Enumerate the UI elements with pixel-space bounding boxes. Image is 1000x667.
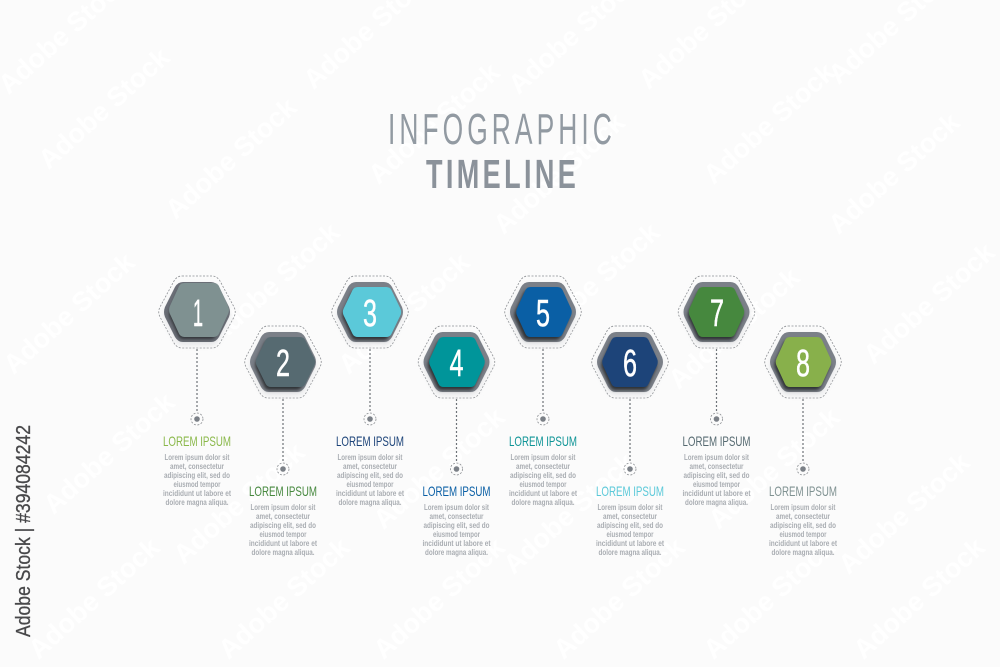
node dot [710,413,722,425]
watermark pattern: Adobe Stock [488,106,631,240]
watermark pattern: Adobe Stock [698,56,841,190]
heading: LOREM IPSUM [336,433,404,449]
body text: adipiscing elit, sed do [510,471,576,480]
watermark pattern: Adobe Stock [548,531,691,665]
body text: dolore magna aliqua. [598,548,662,557]
body text: dolore magna aliqua. [252,548,314,557]
body text: incididunt ut labore et [249,539,317,548]
body text [596,503,664,557]
watermark pattern: Adobe Stock [823,106,966,240]
body text: Lorem ipsum dolor sit [424,503,489,512]
heading: LOREM IPSUM [422,483,490,499]
body text: incididunt ut labore et [682,489,751,498]
title line 1: INFOGRAPHIC [388,104,612,154]
body text: eiusmod tempor [606,530,654,539]
body text: Lorem ipsum dolor sit [770,503,836,512]
icon: hexagon 4: 4 [449,343,464,385]
icon: hexagon 7 [678,276,755,348]
icon: hexagon 5: 5 [536,293,550,335]
node dot [191,413,203,425]
watermark pattern: Adobe Stock [698,531,841,665]
body text: amet, consectetur [516,462,570,471]
body text: dolore magna aliqua. [338,498,402,507]
watermark pattern: Adobe Stock [33,41,176,175]
connector line [282,399,284,462]
connector line [542,349,544,412]
icon: hexagon 3: 3 [363,293,377,335]
body text: dolore magna aliqua. [512,498,574,507]
body text: adipiscing elit, sed do [597,521,663,530]
body text: incididunt ut labore et [336,489,404,498]
icon: hexagon 1: 1 [193,293,203,335]
body text: adipiscing elit, sed do [424,521,490,530]
watermark pattern: Adobe Stock [833,446,976,580]
watermark pattern: Adobe Stock [203,216,346,350]
body text: amet, consectetur [170,462,224,471]
step 5 [505,276,581,507]
watermark pattern: Adobe Stock [368,531,511,665]
node dot [797,463,809,475]
watermark pattern: Adobe Stock [0,246,141,380]
body text: amet, consectetur [776,512,830,521]
body text: Lorem ipsum dolor sit [684,453,749,462]
body text: dolore magna aliqua. [685,498,748,507]
body text: eiusmod tempor [174,480,220,489]
title [388,104,612,197]
icon: hexagon 2 [245,326,321,398]
body text: incididunt ut labore et [509,489,577,498]
body text: adipiscing elit, sed do [684,471,750,480]
body text [769,503,837,557]
watermark pattern: Adobe Stock [160,91,303,225]
icon: hexagon 3 [332,276,408,348]
connector line [802,399,804,462]
node dot [537,413,549,425]
watermark pattern: Adobe Stock [333,246,476,380]
watermark pattern: Adobe Stock [168,436,311,570]
icon: hexagon 8: 8 [796,343,810,385]
heading: LOREM IPSUM [682,433,750,449]
icon: hexagon 5 [505,276,581,348]
body text: incididunt ut labore et [163,489,231,498]
body text [422,503,491,557]
body text: Lorem ipsum dolor sit [598,503,663,512]
body text: eiusmod tempor [520,480,566,489]
body text: incididunt ut labore et [422,539,491,548]
icon: hexagon 4 [418,326,495,398]
watermark pattern: Adobe Stock [498,446,641,580]
body text: incididunt ut labore et [769,539,837,548]
body text: eiusmod tempor [346,480,394,489]
body text [509,453,577,507]
step 8 [765,326,841,557]
body text: Lorem ipsum dolor sit [510,453,576,462]
body text [163,453,231,507]
title line 2: TIMELINE [426,153,576,197]
body text [682,453,751,507]
step 1 [159,276,235,507]
body text: eiusmod tempor [260,530,306,539]
body text: eiusmod tempor [433,530,480,539]
watermark pattern: Adobe Stock [523,216,666,350]
heading: LOREM IPSUM [249,483,317,499]
watermark pattern: Adobe Stock [363,56,506,190]
heading: LOREM IPSUM [163,433,231,449]
node dot [277,463,289,475]
connector line [629,399,631,462]
heading: LOREM IPSUM [596,483,664,499]
body text: dolore magna aliqua. [772,548,834,557]
step 7 [678,276,755,507]
node dot [450,463,462,475]
body text: eiusmod tempor [780,530,826,539]
icon: hexagon 1 [159,276,235,348]
watermark pattern: Adobe Stock [38,386,181,520]
body text: adipiscing elit, sed do [337,471,403,480]
heading: LOREM IPSUM [509,433,577,449]
body text: adipiscing elit, sed do [250,521,316,530]
step 2 [245,326,321,557]
stock id side text: Adobe Stock | #394084242 [13,425,35,637]
body text: dolore magna aliqua. [166,498,228,507]
body text: amet, consectetur [690,462,744,471]
watermark pattern: Adobe Stock [848,531,991,665]
body text [249,503,317,557]
body text: amet, consectetur [603,512,657,521]
watermark pattern: Adobe Stock [23,531,166,665]
icon: hexagon 6: 6 [623,343,637,385]
node dot [364,413,376,425]
body text: incididunt ut labore et [596,539,664,548]
body text: adipiscing elit, sed do [164,471,230,480]
body text: Lorem ipsum dolor sit [164,453,230,462]
body text: adipiscing elit, sed do [770,521,836,530]
watermark pattern: Adobe Stock [663,261,806,395]
heading: LOREM IPSUM [769,483,837,499]
body text [336,453,404,507]
body text: Lorem ipsum dolor sit [338,453,403,462]
icon: hexagon 8 [765,326,841,398]
step 4 [418,326,495,557]
watermark pattern: Adobe Stock [703,401,846,535]
connector line [196,349,198,412]
step 6 [592,326,668,557]
watermark pattern: Adobe Stock [368,401,511,535]
watermark pattern: Adobe Stock [213,531,356,665]
body text: dolore magna aliqua. [425,548,488,557]
icon: hexagon 7: 7 [710,293,724,335]
body text: amet, consectetur [430,512,484,521]
connector line [456,399,458,462]
connector line [369,349,371,412]
icon: hexagon 6 [592,326,668,398]
body text: Lorem ipsum dolor sit [250,503,316,512]
node dot [624,463,636,475]
body text: amet, consectetur [343,462,397,471]
body text: amet, consectetur [256,512,310,521]
watermark pattern: Adobe Stock [858,236,1000,370]
icon: hexagon 2: 2 [276,343,290,385]
connector line [716,349,718,412]
step 3 [332,276,408,507]
body text: eiusmod tempor [693,480,740,489]
